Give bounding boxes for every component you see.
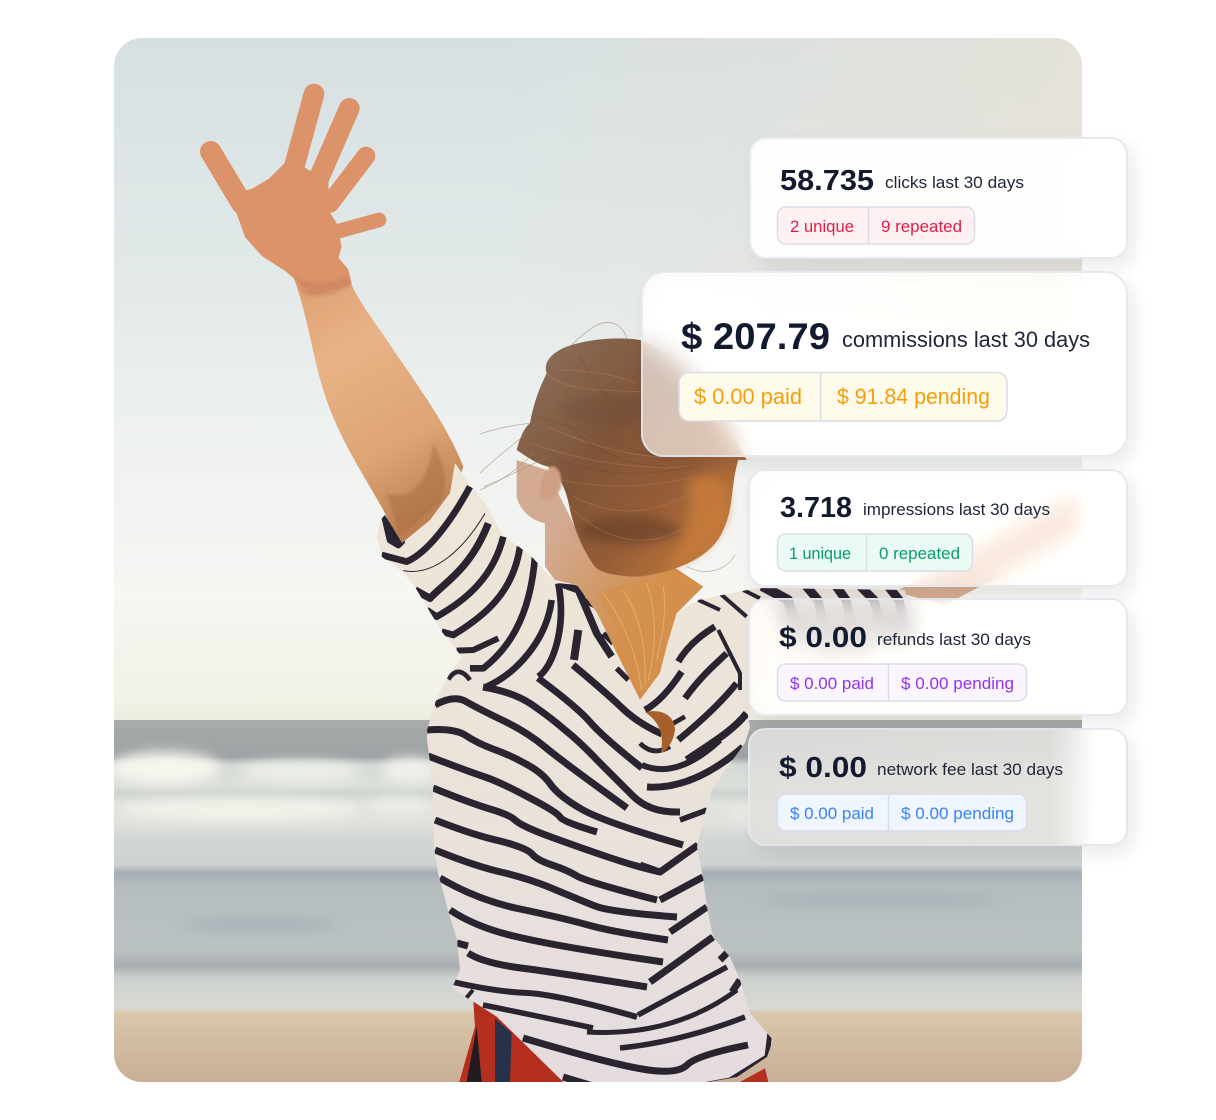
sky background (114, 38, 1082, 728)
impressions value: 3.718 (780, 492, 852, 524)
sleeve and collar stripes (382, 487, 760, 760)
refunds pill (778, 664, 1026, 701)
network fee pill (778, 794, 1026, 831)
refunds label: refunds last 30 days (877, 631, 1031, 649)
clicks label: clicks last 30 days (885, 174, 1024, 192)
commissions pill: $ 0.00 paid (694, 384, 802, 409)
network fee pill: $ 0.00 paid (790, 805, 874, 823)
card: commissions (641, 271, 1128, 457)
clicks pill: 9 repeated (881, 218, 962, 236)
refunds pill: $ 0.00 pending (901, 675, 1014, 693)
card: refunds (748, 598, 1128, 716)
commissions value: $ 207.79 (681, 316, 830, 357)
impressions pill: 1 unique (789, 545, 851, 563)
commissions label: commissions last 30 days (842, 327, 1090, 352)
commissions pill: $ 91.84 pending (837, 384, 990, 409)
card: clicks (749, 137, 1128, 259)
left arm and hand (211, 94, 463, 543)
clicks pill: 2 unique (790, 218, 854, 236)
commissions pill (679, 372, 1007, 421)
card: impressions (748, 469, 1128, 587)
face and neck (517, 460, 703, 700)
right arm (blurred behind the cards) (899, 494, 1084, 605)
network fee pill: $ 0.00 pending (901, 805, 1014, 823)
striped shirt (377, 463, 915, 1086)
refunds pill: $ 0.00 paid (790, 675, 874, 693)
photo: woman at the beach with raised arms (114, 38, 1084, 1082)
shirt cutout (645, 711, 675, 753)
sleeve stripes behind the cards (762, 586, 908, 650)
hair (480, 322, 747, 577)
ear (540, 466, 561, 500)
shorts (459, 1002, 768, 1082)
refunds value: $ 0.00 (779, 622, 867, 654)
sea and sand (110, 720, 1082, 1082)
clicks value: 58.735 (780, 165, 874, 197)
impressions pill (778, 534, 972, 571)
card: network fee (748, 728, 1128, 846)
body stripes (427, 665, 770, 1086)
network fee label: network fee last 30 days (877, 761, 1063, 779)
impressions label: impressions last 30 days (863, 501, 1050, 519)
network fee value: $ 0.00 (779, 752, 867, 784)
clicks pill (778, 207, 974, 244)
impressions pill: 0 repeated (879, 545, 960, 563)
